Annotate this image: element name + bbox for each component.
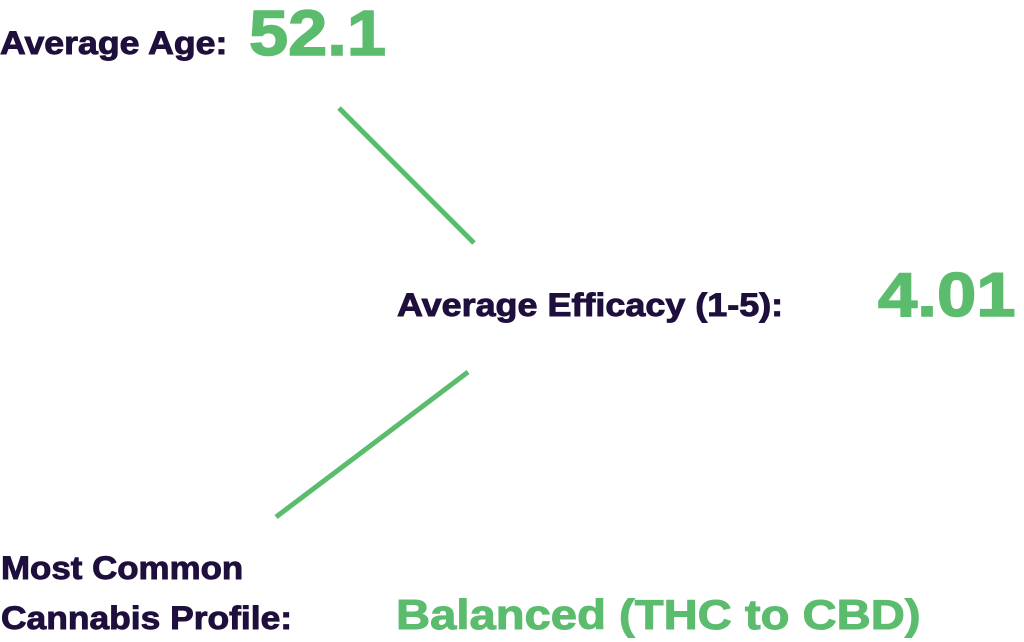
- label: average efficacy: Average Efficacy (1-5):: [397, 287, 783, 323]
- label: average age: Average Age:: [0, 25, 227, 61]
- label: most common: Most Common: [1, 550, 243, 586]
- value: balanced: Balanced (THC to CBD): [396, 590, 921, 638]
- label: cannabis profile: Cannabis Profile:: [1, 600, 292, 636]
- line: upper connector: [339, 108, 474, 243]
- line: lower connector: [276, 372, 468, 517]
- value: 4.01: 4.01: [878, 260, 1016, 330]
